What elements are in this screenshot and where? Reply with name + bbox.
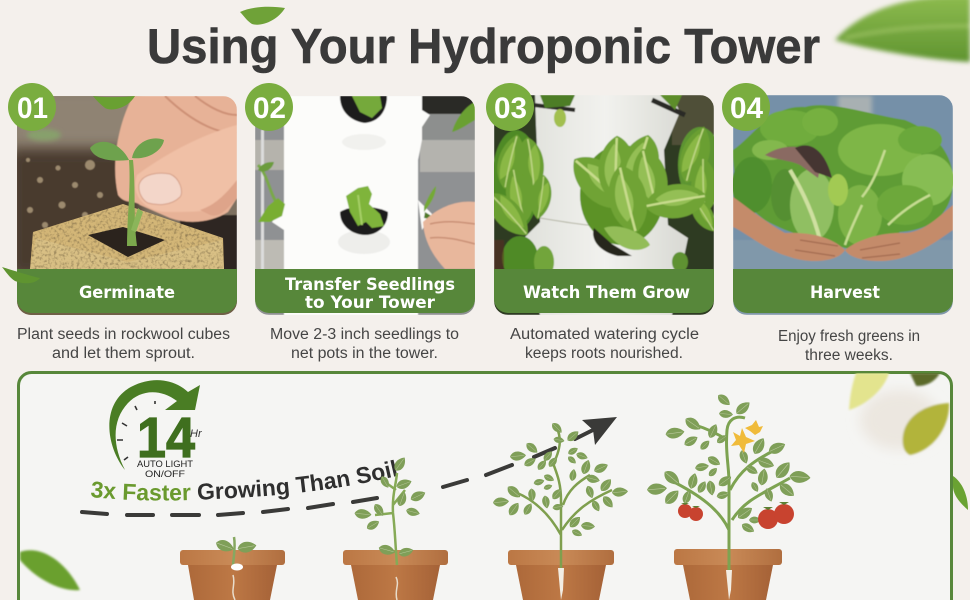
auto light caption xyxy=(137,459,193,480)
description 4 xyxy=(778,328,920,364)
number 14: 14 xyxy=(137,406,195,470)
auto light caption: ON/OFF xyxy=(145,469,185,480)
label: Transfer Seedlings to Your Tower: to Your Tower xyxy=(305,293,436,313)
panel: step 4 harvest xyxy=(722,83,954,364)
Hr: Hr xyxy=(190,428,203,440)
photo: lettuce growing on tower xyxy=(480,95,722,315)
number badge 01 xyxy=(8,83,56,131)
green label band xyxy=(733,269,953,313)
number badge 04: 04 xyxy=(730,92,763,125)
description 3 xyxy=(510,326,699,362)
description 4: three weeks. xyxy=(805,347,893,364)
label: Harvest: Harvest xyxy=(810,283,880,303)
panel: growth comparison xyxy=(17,371,968,600)
right hand xyxy=(845,205,953,261)
panel: step 3 watch them grow xyxy=(480,83,722,362)
description 1 xyxy=(17,326,230,362)
number badge 03 xyxy=(486,83,534,131)
green label band xyxy=(494,269,714,313)
decorative leaves: top right blurred xyxy=(849,373,949,455)
description 1: Plant seeds in rockwool cubes xyxy=(17,326,230,343)
tomatoes xyxy=(678,502,794,529)
lower greens xyxy=(502,236,538,269)
right lettuce xyxy=(677,126,714,186)
central lettuce xyxy=(580,145,664,245)
dashed growth arrow xyxy=(82,417,617,515)
title: Using Your Hydroponic Tower xyxy=(147,20,820,74)
auto light caption: AUTO LIGHT xyxy=(137,459,193,470)
number badge 03: 03 xyxy=(494,92,527,125)
description 2 xyxy=(270,326,459,362)
clock ticks xyxy=(117,401,155,460)
decorative leaf: bottom left blurred xyxy=(20,550,80,590)
label: Watch Them Grow: Watch Them Grow xyxy=(523,283,690,303)
description 4: Enjoy fresh greens in xyxy=(778,328,920,345)
photo: hands holding lettuce xyxy=(732,95,954,315)
pot 1 with sprout xyxy=(180,537,285,600)
description 2: Move 2-3 inch seedlings to xyxy=(270,326,459,343)
panel: step 2 transfer seedlings xyxy=(245,83,475,362)
green label band xyxy=(17,269,237,313)
number badge 02: 02 xyxy=(253,92,286,125)
decorative leaf: right edge xyxy=(953,476,968,510)
description 3: Automated watering cycle xyxy=(510,326,699,343)
clock arrow arc xyxy=(109,380,200,470)
lettuce mass xyxy=(733,105,953,248)
decorative leaf: top right blurred xyxy=(835,0,970,62)
green label band xyxy=(255,269,475,313)
photo: white tower with net pots xyxy=(255,96,475,315)
number badge 04 xyxy=(722,83,770,131)
label: Transfer Seedlings to Your Tower xyxy=(285,275,455,313)
label: Transfer Seedlings to Your Tower: Transfer Seedlings xyxy=(285,275,455,295)
pot 4 with fruiting tomato plant xyxy=(647,392,811,600)
pot 3 with bushy plant xyxy=(493,421,628,600)
label: Germinate: Germinate xyxy=(79,283,175,303)
panel frame xyxy=(18,372,952,600)
pot 2 with young plant xyxy=(343,455,448,600)
panel: step 1 germinate xyxy=(2,83,237,362)
photo: seedling in rockwool cube xyxy=(10,90,237,316)
left hand xyxy=(733,197,845,261)
decorative leaf: top centre xyxy=(240,7,285,25)
description 2: net pots in the tower. xyxy=(291,345,438,362)
number badge 01: 01 xyxy=(17,92,48,125)
yellow flowers xyxy=(731,420,763,453)
description 1: and let them sprout. xyxy=(52,345,195,362)
left lettuce xyxy=(494,130,534,224)
description 3: keeps roots nourished. xyxy=(525,345,683,362)
falling leaf xyxy=(2,267,40,283)
number badge 02 xyxy=(245,83,293,131)
clock badge: 14 Hr auto light xyxy=(109,380,203,480)
curved headline: 3x Faster Growing Than Soil: 3x Faster Growing Than Soil xyxy=(91,460,397,501)
